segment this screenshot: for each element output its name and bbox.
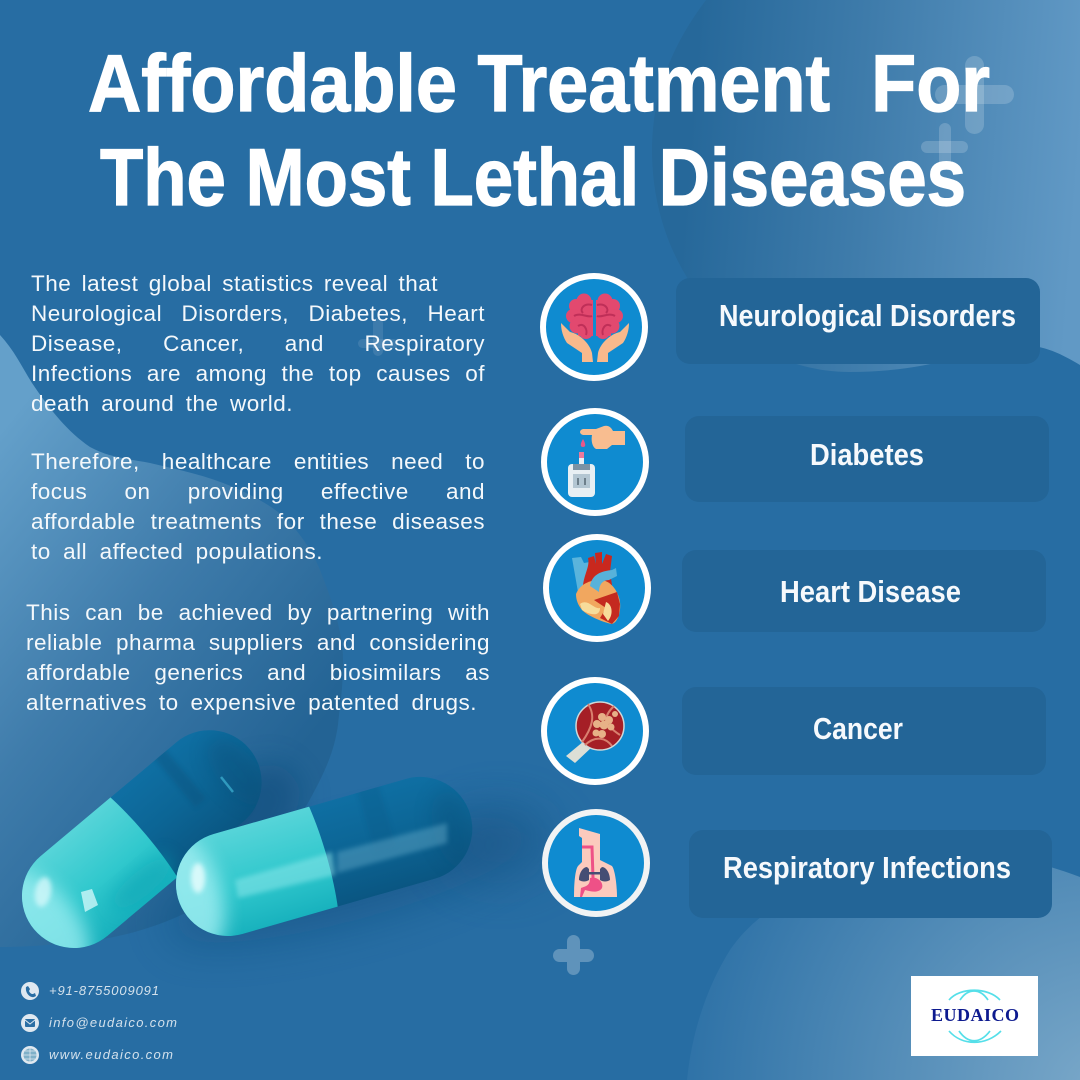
paragraph: healthcare entities: [31, 449, 485, 564]
card: Heart Disease: Heart Disease: [780, 574, 961, 609]
capsule shadows: [156, 744, 560, 968]
logo: Eudaico: [911, 976, 1038, 1056]
icon: respiratory system: [545, 812, 647, 914]
card: Respiratory Infections: [689, 830, 1052, 918]
contact: website: [21, 1046, 173, 1064]
icon: heart: [546, 537, 648, 639]
paragraph: global statistics: death around the world.: [31, 391, 293, 416]
card: Respiratory Infections: Respiratory Infections: [723, 850, 1011, 885]
card: Neurological Disorders: Neurological Disorders: [719, 298, 1016, 333]
icon: brain in hands: [543, 276, 645, 378]
icon: tumor under magnifier: [544, 680, 646, 782]
paragraph: global statistics: [31, 271, 485, 416]
contact: phone: +91-8755009091: [49, 983, 159, 998]
paragraph: pharma suppliers: reliable pharma suppliers and considering: [26, 630, 490, 655]
card: Diabetes: [685, 416, 1049, 502]
card: Diabetes: Diabetes: [810, 437, 924, 472]
capsules image: [22, 730, 546, 948]
paragraph: healthcare entities: Therefore, healthcare entities need to: [31, 449, 485, 474]
icon: glucose meter: [544, 411, 646, 513]
paragraph: pharma suppliers: [26, 600, 490, 715]
contact: email: info@eudaico.com: [49, 1015, 177, 1030]
paragraph: global statistics: Neurological Disorders, Diabetes, Heart: [31, 301, 485, 326]
paragraph: healthcare entities: to all affected populations.: [31, 539, 323, 564]
contact: email: [21, 1014, 177, 1032]
card: Cancer: Cancer: [813, 711, 903, 746]
paragraph: pharma suppliers: affordable generics and biosimilars as: [26, 660, 490, 685]
capsule: back left: [22, 730, 262, 948]
card: Heart Disease: [682, 550, 1046, 632]
contact: phone: [21, 982, 159, 1000]
paragraph: global statistics: Infections are among the top causes of: [31, 361, 485, 386]
contact: website: www.eudaico.com: [49, 1047, 173, 1062]
paragraph: pharma suppliers: alternatives to expensive patented drugs.: [26, 690, 477, 715]
logo: Eudaico: EUDAICO: [931, 1005, 1019, 1025]
title: [88, 39, 990, 223]
paragraph: global statistics: The latest global statistics reveal that: [31, 271, 438, 296]
title: Affordable Treatment For: [88, 39, 990, 129]
paragraph: healthcare entities: affordable treatments for these diseases: [31, 509, 485, 534]
paragraph: pharma suppliers: This can be achieved by partnering with: [26, 600, 490, 625]
card: Cancer: [682, 687, 1046, 775]
paragraph: healthcare entities: focus on providing effective and: [31, 479, 485, 504]
capsule: front right: [176, 777, 472, 936]
title: The Most Lethal Diseases: [100, 133, 966, 223]
paragraph: global statistics: Disease, Cancer, and Respiratory: [31, 331, 485, 356]
